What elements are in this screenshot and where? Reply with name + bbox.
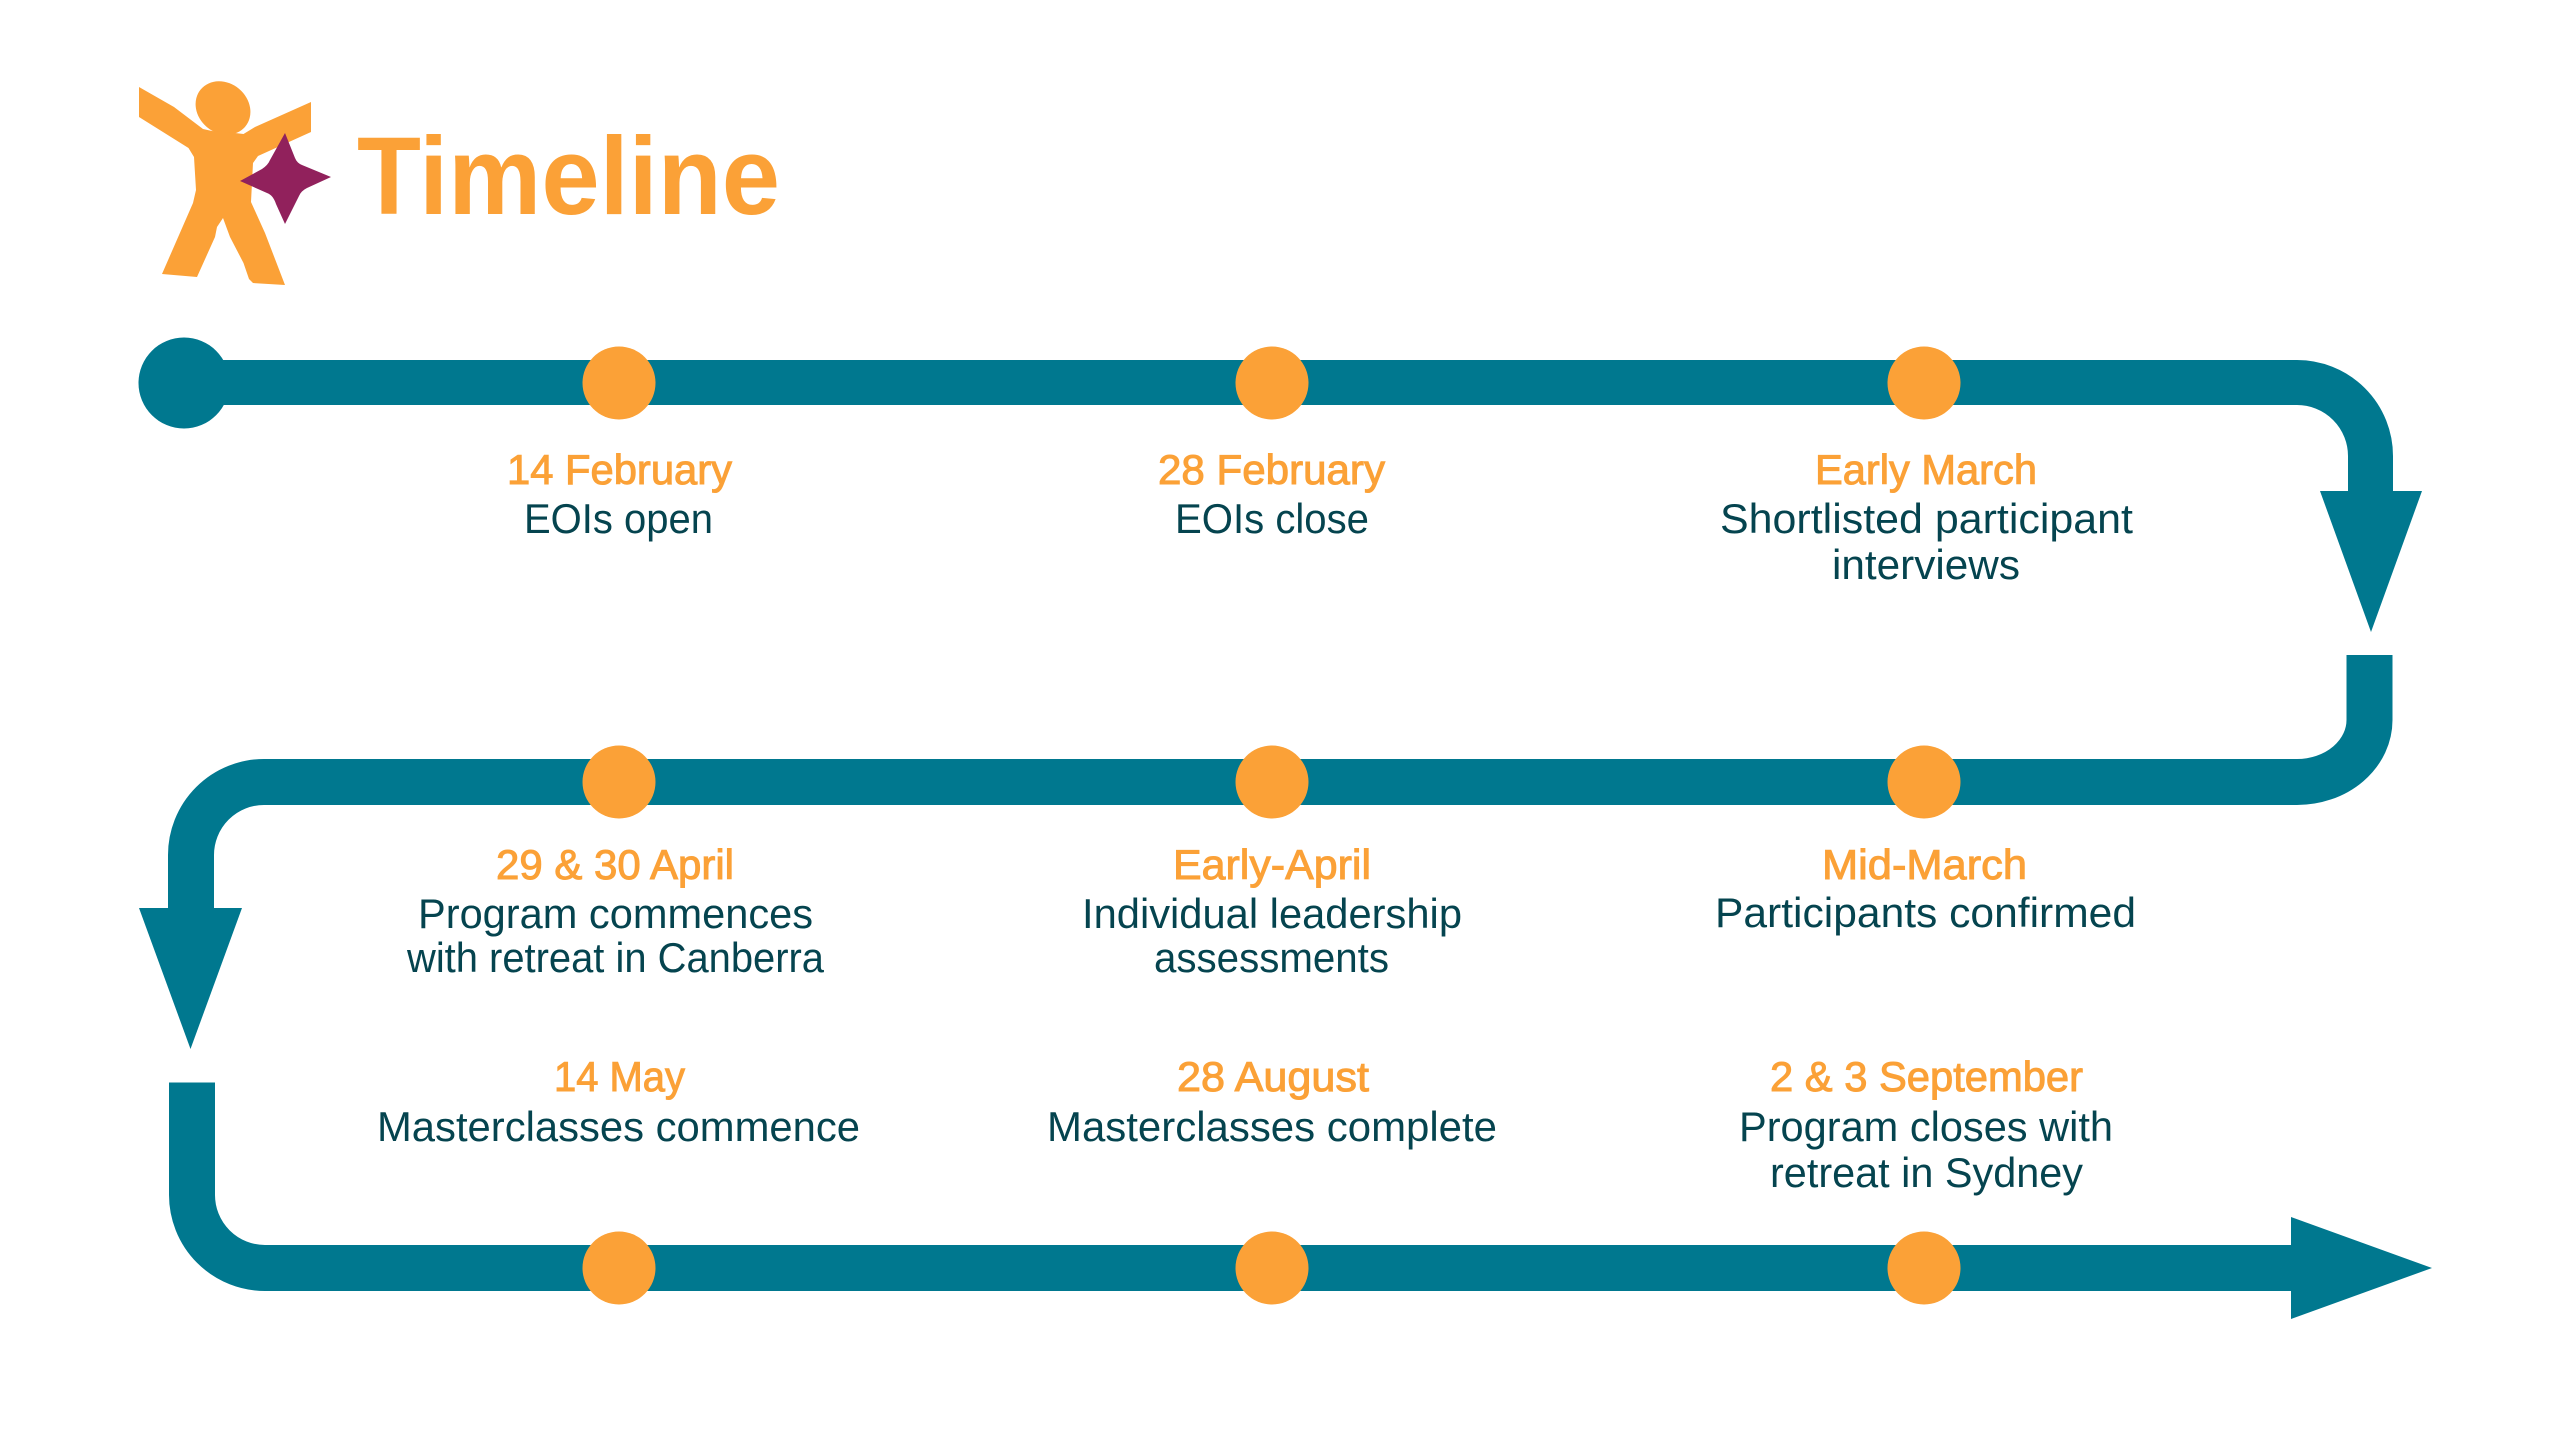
milestone: Early March: interviews [1832,541,2020,588]
milestone: Early March [1720,446,2133,588]
milestone: 28 August: 28 August [1177,1053,1369,1100]
title: Timeline [357,115,780,238]
milestone: 14 February [507,446,732,542]
milestone: 29 & 30 April: 29 & 30 April [496,841,734,888]
milestone: 14 May: 14 May [554,1053,685,1100]
milestone: 29 & 30 April: with retreat in Canberra [406,934,825,981]
milestone: 29 & 30 April: Program commences [418,890,813,937]
milestone: Early March: Shortlisted participant [1720,495,2133,542]
icon: orange figure [139,70,311,285]
milestone: 14 May [377,1053,860,1150]
milestone: Mid-March: Mid-March [1822,841,2027,888]
milestone: 28 August [1047,1053,1497,1150]
milestone: Mid-March: Participants confirmed [1715,889,2136,936]
icon: start point [138,338,230,428]
milestone: Early March: Early March [1815,446,2037,493]
milestone: Early-April [1082,841,1462,981]
milestone: 28 February: 28 February [1158,446,1385,493]
milestone: 2 & 3 September: retreat in Sydney [1770,1149,2083,1196]
milestone: 14 May: Masterclasses commence [377,1103,860,1150]
milestone: Early-April: assessments [1154,934,1389,981]
milestone: 14 February: EOIs open [524,495,713,542]
milestone: 2 & 3 September: Program closes with [1739,1103,2113,1150]
milestone: Early-April: Individual leadership [1082,890,1462,937]
arrow: third row path [192,1082,2432,1319]
milestone: 2 & 3 September: 2 & 3 September [1770,1053,2083,1100]
milestone: 2 & 3 September [1739,1053,2113,1196]
milestone: 29 & 30 April [406,841,825,981]
milestone markers [582,346,1960,1304]
milestone: 14 February: 14 February [507,446,732,493]
milestone: 28 February [1158,446,1385,542]
milestone: 28 February: EOIs close [1175,495,1369,542]
icon: logo figure with star [139,70,331,285]
arrow: first row path [184,382,2422,632]
icon: maroon star [240,133,331,224]
milestone: Early-April: Early-April [1173,841,1371,888]
milestone: 28 August: Masterclasses complete [1047,1103,1497,1150]
arrow: second row path [139,655,2370,1049]
milestone: Mid-March [1715,841,2136,936]
